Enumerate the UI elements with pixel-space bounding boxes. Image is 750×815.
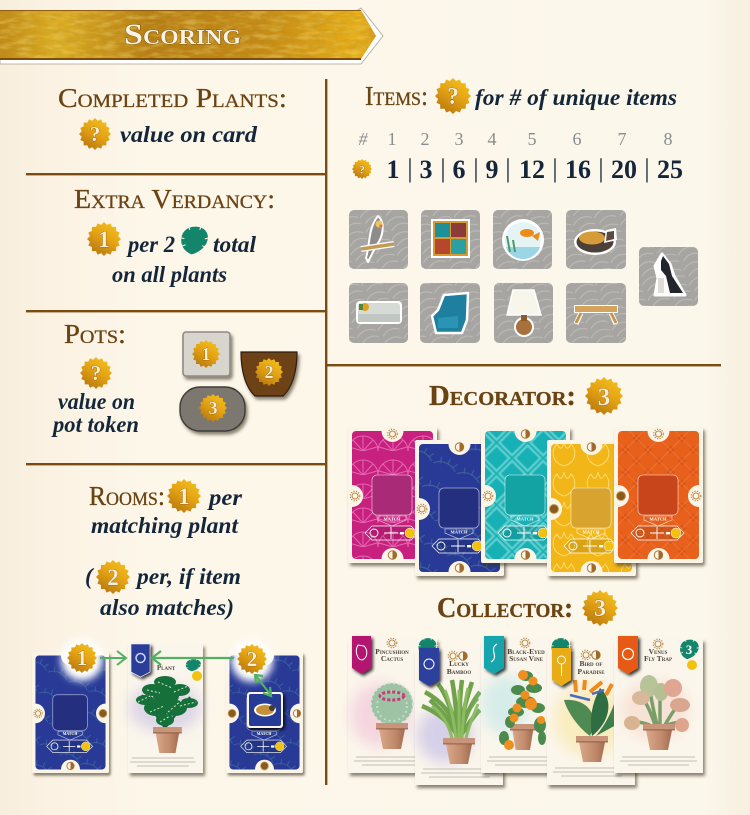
arrow: two to item xyxy=(255,675,271,696)
tag: magenta bookmark xyxy=(352,636,371,674)
item: dog xyxy=(639,247,698,306)
text: value on pot token: pot token xyxy=(51,412,139,437)
item: lamp xyxy=(494,283,553,343)
panel: completed plants xyxy=(58,83,287,150)
token: white square pot xyxy=(183,332,230,376)
plant illustration: Plant xyxy=(157,664,176,672)
text: per if item also matches: per, if item xyxy=(135,564,241,589)
heading: extra verdancy: Extra Verdancy: xyxy=(74,184,275,214)
badge: one point xyxy=(167,479,201,513)
card: venus fly trap xyxy=(614,638,703,773)
heading: completed plants: Completed Plants: xyxy=(58,83,287,113)
heading: rooms: Rooms: xyxy=(89,481,165,511)
card: lucky bamboo xyxy=(415,650,503,785)
card: bird of paradise: Paradise xyxy=(577,667,605,676)
tag: yellow bookmark xyxy=(552,648,571,686)
table: item count row: 1 xyxy=(388,129,396,149)
card: teal room xyxy=(480,428,574,568)
badge: question mark xyxy=(435,78,471,114)
badge: two with glow: 2 xyxy=(247,647,257,671)
card: navy room xyxy=(26,646,115,779)
panel: collector xyxy=(348,590,703,785)
text: on all plants: on all plants xyxy=(112,262,227,287)
text: per matching plant: per xyxy=(207,485,243,510)
heading: items: Items: xyxy=(365,81,428,111)
card: venus fly trap: Venus xyxy=(649,647,668,656)
card: pincushion cactus xyxy=(348,637,438,773)
table: item count row: 2 xyxy=(420,129,430,149)
item: table xyxy=(566,283,626,343)
table: score row: | xyxy=(440,154,446,183)
table: score row: | xyxy=(505,154,511,183)
arrow: one to tag xyxy=(100,651,126,665)
badge: two points xyxy=(96,560,130,594)
table: score row: 1 xyxy=(386,155,400,184)
item: armchair xyxy=(420,283,480,343)
text: per if item also matches xyxy=(100,564,241,620)
table: score row: | xyxy=(407,154,413,183)
table: score row: | xyxy=(473,154,479,183)
card: pincushion cactus: Cactus xyxy=(381,654,403,663)
table: item count row: 5 xyxy=(528,129,536,149)
badge: small question mark: ? xyxy=(359,162,365,176)
token: brown bowl pot xyxy=(241,352,297,396)
card: navy room xyxy=(408,433,511,583)
card: plant xyxy=(128,644,203,773)
card: yellow room xyxy=(546,440,640,582)
token: white square pot: 1 xyxy=(202,344,210,364)
badge: two points: 2 xyxy=(107,565,119,590)
panel: rooms xyxy=(85,479,243,620)
text: for number of unique items: for # of unique items xyxy=(475,85,677,110)
badge: three xyxy=(585,377,623,415)
card: venus fly trap: 3 xyxy=(686,642,693,657)
text: per matching plant: matching plant xyxy=(91,513,239,538)
card: bird of paradise xyxy=(547,650,635,785)
table: score row: 12 xyxy=(519,155,545,184)
example: room scoring cards xyxy=(26,639,309,779)
card: venus fly trap: Fly Trap xyxy=(644,654,672,663)
item: fishbowl xyxy=(493,210,552,269)
panel: pots xyxy=(51,319,297,437)
badge: one with glow xyxy=(61,639,103,681)
item: cat xyxy=(566,210,626,269)
table: item count row: 7 xyxy=(618,129,626,149)
item: cockatiel xyxy=(349,210,408,269)
card: black-eyed susan vine: Susan Vine xyxy=(509,654,544,663)
heading: pots: Pots: xyxy=(64,319,126,349)
badge: one point: 1 xyxy=(98,227,110,252)
card: black-eyed susan vine: Black-Eyed xyxy=(507,647,545,656)
icon: verdancy leaf xyxy=(179,224,211,254)
card: bird of paradise: Bird of xyxy=(580,659,602,668)
table: score row: | xyxy=(644,154,650,183)
text: value on pot token xyxy=(51,389,139,437)
badge: question mark xyxy=(79,118,111,150)
badge: one point xyxy=(87,222,121,256)
card: pincushion cactus: Pincushion xyxy=(375,647,409,656)
token: brown bowl pot: 2 xyxy=(264,362,274,382)
arrow: two to tag xyxy=(152,651,234,665)
panel: decorator xyxy=(341,377,710,583)
badge: two with glow xyxy=(231,640,273,682)
card: orange room xyxy=(614,428,708,568)
badge: small question mark xyxy=(352,159,372,179)
card: navy room with item xyxy=(220,646,309,779)
table: score row: | xyxy=(552,154,558,183)
text: total: total xyxy=(213,232,257,257)
badge: question mark: ? xyxy=(90,122,100,146)
panel: extra verdancy xyxy=(74,184,275,287)
text: per if item also matches: also matches) xyxy=(100,595,234,620)
tag: navy bookmark xyxy=(419,648,439,686)
tag: teal bookmark xyxy=(484,636,504,674)
item: bookshelf xyxy=(421,210,480,269)
table: item count row: # xyxy=(358,129,368,149)
table: score row: 16 xyxy=(565,155,591,184)
text: value on card: value on card xyxy=(120,122,258,147)
tag: navy bookmark xyxy=(131,644,150,677)
badge: one with glow: 1 xyxy=(77,646,87,670)
heading: collector: Collector: xyxy=(437,593,573,624)
item: sofa xyxy=(349,283,408,343)
item tile: cat on card xyxy=(247,692,283,728)
banner: Scoring xyxy=(0,8,383,64)
token: grey round pot: 3 xyxy=(208,398,218,418)
table: score row: 3 xyxy=(420,155,432,184)
panel: items xyxy=(349,78,698,343)
card: magenta room xyxy=(348,428,442,568)
table: score row: 6 xyxy=(452,155,466,184)
table: score row xyxy=(386,154,683,184)
badge: question mark xyxy=(80,357,112,389)
table: item count row: 3 xyxy=(454,129,464,149)
table: item count row: 8 xyxy=(664,129,672,149)
badge: question mark: ? xyxy=(447,84,459,110)
table: score row: 25 xyxy=(657,155,683,184)
table: score row: 9 xyxy=(486,155,498,184)
tag: orange bookmark xyxy=(618,636,638,674)
text: per matching plant xyxy=(91,485,243,538)
badge: one point: 1 xyxy=(178,484,190,509)
badge: three: 3 xyxy=(598,384,610,411)
badge: three: 3 xyxy=(594,596,606,622)
table: item count row xyxy=(358,129,672,149)
card: black-eyed susan vine xyxy=(481,637,571,773)
text: per 2: per 2 xyxy=(126,232,175,257)
plant illustration xyxy=(129,658,203,766)
table: score row: 20 xyxy=(611,155,637,184)
token: grey round pot xyxy=(180,387,245,431)
heading: Scoring: Scoring xyxy=(124,18,241,51)
table: item count row: 6 xyxy=(572,129,582,149)
card: lucky bamboo: Bamboo xyxy=(447,667,471,676)
card: lucky bamboo: Lucky xyxy=(449,659,469,668)
badge: three xyxy=(582,590,618,626)
table: score row: | xyxy=(598,154,604,183)
table: item count row: 4 xyxy=(488,129,496,149)
heading: decorator: Decorator: xyxy=(429,381,576,412)
text: value on pot token: value on xyxy=(58,389,135,414)
text: open parenthesis: ( xyxy=(85,564,95,589)
badge: question mark: ? xyxy=(91,361,101,385)
